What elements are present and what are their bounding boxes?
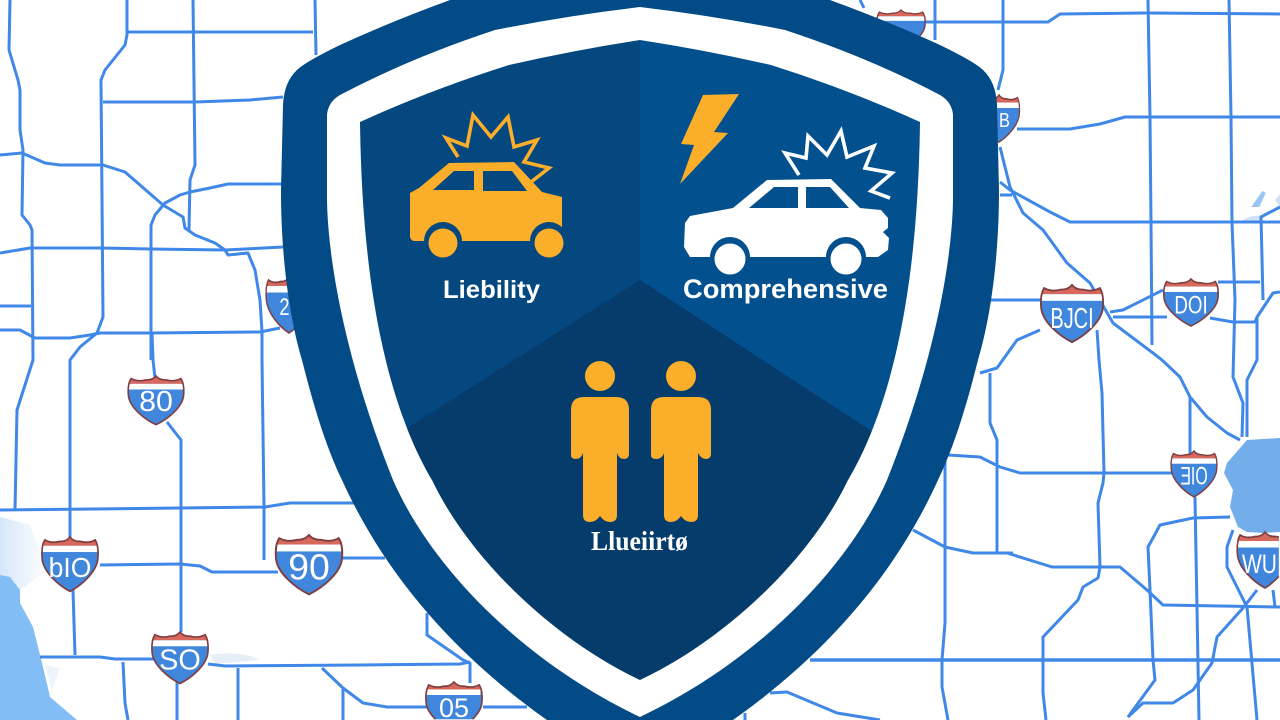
wheel arches — [424, 222, 568, 241]
route shield: right edge — [1237, 532, 1279, 588]
label: Liebility: Liebility — [443, 276, 540, 304]
car body — [410, 162, 562, 241]
route shield: 90: 90 — [288, 547, 330, 587]
shield outer ring — [281, 0, 999, 720]
route shield: 90 — [275, 534, 343, 594]
route shield: 05 — [426, 682, 482, 720]
car body — [684, 179, 889, 257]
pane: comprehensive, right — [640, 40, 920, 480]
route shield: 50 — [151, 631, 209, 684]
route shield: 80: 80 — [139, 386, 173, 418]
route shield: behind big shield right: B — [999, 108, 1010, 131]
burst — [446, 115, 549, 182]
label: Comprehensive: Comprehensive — [683, 274, 888, 304]
icon: two people — [571, 361, 711, 522]
route shield: upper right — [1163, 278, 1219, 326]
icon: lightning bolt — [680, 94, 739, 184]
wheel arches — [710, 237, 866, 257]
label: lower pane: Llueiirtø — [591, 526, 688, 556]
route shield: 80 — [127, 375, 185, 425]
route shield: upper right: DOI — [1174, 290, 1208, 319]
route shield: behind big shield left: 2 — [279, 294, 290, 321]
burst — [785, 131, 892, 198]
big coverage shield — [281, 0, 999, 720]
route shield: 10: bIO — [49, 551, 91, 583]
route shield: top, behind big shield — [876, 9, 926, 49]
route shield: right centre: BJCI — [1050, 303, 1094, 335]
pane: lower — [407, 280, 872, 680]
shield white band — [327, 7, 953, 717]
route shield: 10 — [41, 536, 99, 591]
route shield: 50: SO — [159, 645, 201, 677]
person left — [571, 361, 629, 522]
wheels — [428, 228, 564, 258]
person right — [651, 361, 711, 522]
route shield: right centre — [1040, 284, 1104, 342]
route shield: far right: ƎIO — [1180, 464, 1208, 491]
route shield: behind big shield left — [265, 276, 313, 333]
route shield: far right — [1170, 450, 1218, 497]
icon: white car with crash burst — [684, 131, 892, 274]
wheels — [714, 244, 862, 274]
icon: orange car with crash burst — [410, 115, 568, 258]
shield three panes — [360, 40, 920, 680]
pane: liability, left — [360, 40, 640, 480]
windows — [749, 187, 849, 208]
windows — [433, 171, 527, 191]
water: lakes and pale coastal patches — [0, 192, 1280, 720]
route shield: behind big shield right — [978, 94, 1020, 142]
